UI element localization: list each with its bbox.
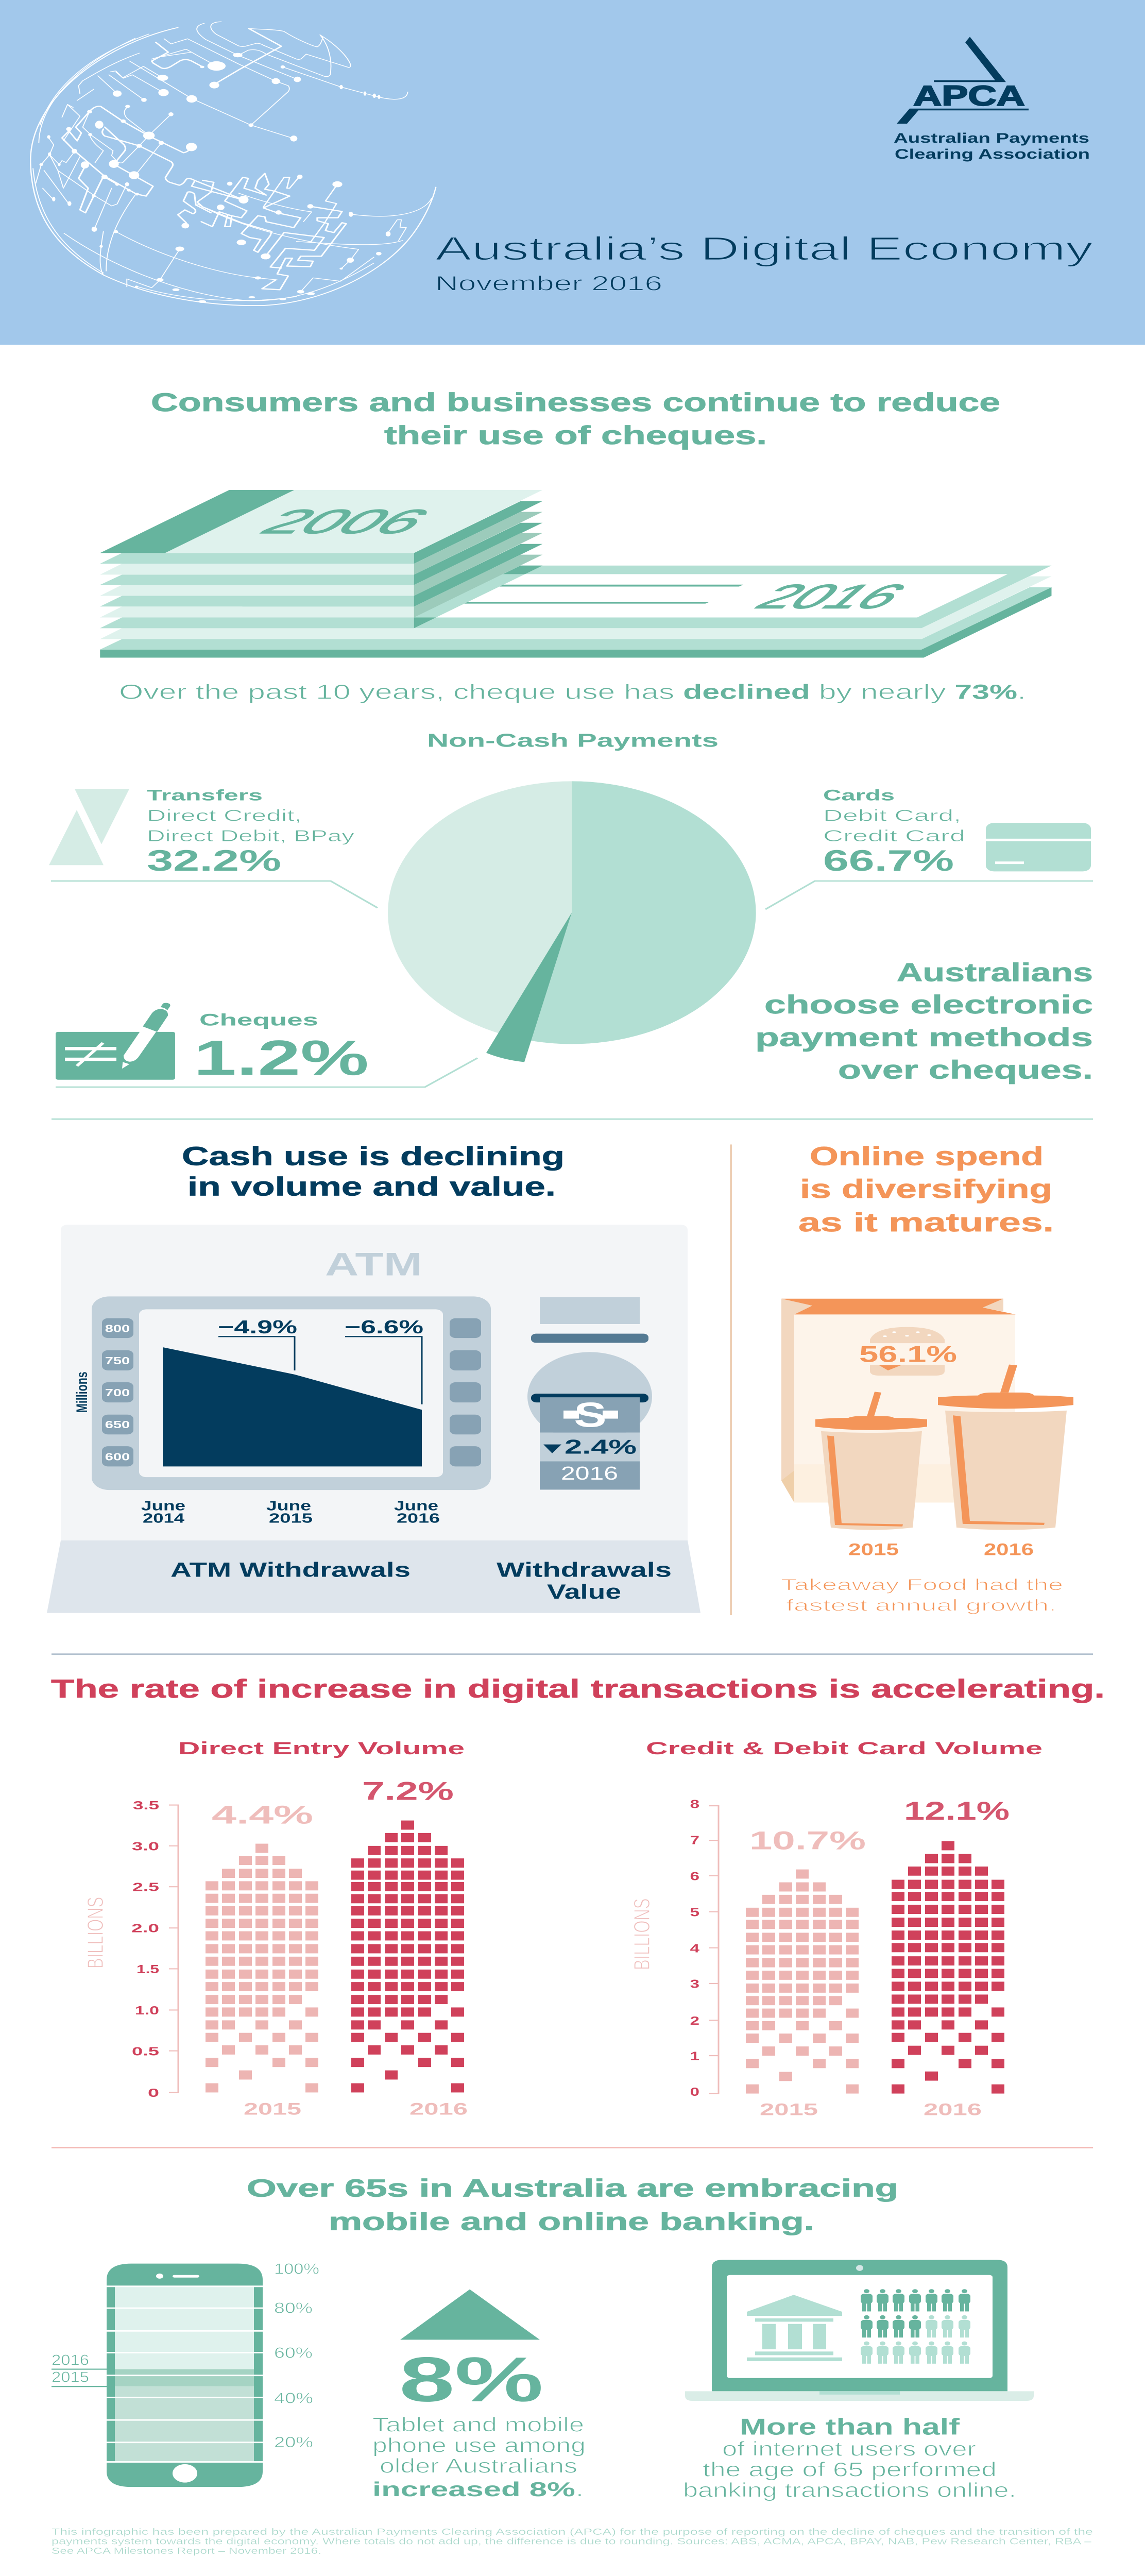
heading: direct entry: Direct Entry Volume xyxy=(178,1738,465,1758)
axis labels: 700 xyxy=(105,1387,130,1399)
heading: online spend: is diversifying xyxy=(800,1174,1052,1204)
text: tablet and mobile: phone use among xyxy=(372,2434,586,2456)
illustration: cup 2015 xyxy=(815,1392,927,1530)
axis labels: 2 xyxy=(690,2014,699,2028)
callout: electronic payments: over cheques. xyxy=(838,1055,1093,1084)
axis labels: 0 xyxy=(148,2086,159,2100)
axis labels xyxy=(105,1323,130,1463)
icon: dollar xyxy=(563,1395,618,1434)
illustration: circuit globe xyxy=(30,22,436,306)
axis labels: 3.0 xyxy=(132,1840,159,1853)
year markers xyxy=(52,2352,107,2386)
axis labels xyxy=(690,1798,699,2099)
year labels: 2016 xyxy=(409,2100,468,2119)
panel: card volume xyxy=(629,1738,1043,2119)
axis title: BILLIONS xyxy=(83,1897,108,1969)
heading: online spend: Online spend xyxy=(810,1141,1044,1171)
year labels: 2015 xyxy=(244,2100,301,2119)
panel: cash use xyxy=(47,1142,700,1613)
values xyxy=(218,1317,423,1337)
scale labels: 80% xyxy=(274,2300,313,2316)
label: ATM: ATM xyxy=(325,1247,422,1283)
leaders xyxy=(218,1336,422,1404)
text: cheques xyxy=(194,1011,369,1086)
heading: card volume: Credit & Debit Card Volume xyxy=(646,1738,1043,1758)
icon: dollar: S xyxy=(574,1395,607,1434)
value: 2016: 7.2% xyxy=(362,1776,454,1805)
axis labels: 600 xyxy=(105,1451,130,1463)
labels: cup years: 2016 xyxy=(984,1540,1034,1559)
heading: online spend xyxy=(798,1141,1054,1238)
year markers: 2016 xyxy=(52,2352,89,2368)
heading: over 65s xyxy=(247,2174,898,2235)
panel: online spend xyxy=(781,1141,1073,1615)
callout: electronic payments xyxy=(755,958,1093,1084)
label: 2016: 2016 xyxy=(743,578,920,616)
scale labels: 20% xyxy=(274,2434,313,2451)
axis labels: 650 xyxy=(105,1419,130,1431)
text: cards: 66.7% xyxy=(823,844,954,877)
axis labels xyxy=(131,1799,159,2100)
heading: digital transactions: The rate of increase in digital transactions is accelerating. xyxy=(51,1674,1105,1703)
year labels xyxy=(760,2100,982,2119)
text: cards xyxy=(823,786,965,877)
text: tablet and mobile: increased 8% . xyxy=(372,2478,584,2500)
year: 2016 xyxy=(561,1464,618,1484)
scale labels: 60% xyxy=(274,2345,313,2361)
value: withdrawals value xyxy=(543,1436,637,1458)
axis labels: 800 xyxy=(105,1323,130,1335)
values: −6.6% xyxy=(345,1317,423,1337)
axis labels: 6 xyxy=(690,1870,699,1883)
labels: cup years: 2015 xyxy=(848,1540,899,1559)
heading: non-cash payments: Non-Cash Payments xyxy=(427,731,719,751)
text: takeaway caption: Takeaway Food had the xyxy=(781,1575,1063,1594)
pie chart xyxy=(388,781,756,1062)
text: cards: Cards xyxy=(823,786,895,804)
x-axis dates xyxy=(141,1498,440,1526)
axis labels: 2.0 xyxy=(131,1922,159,1935)
text: transfers: Transfers xyxy=(147,786,263,804)
illustration: cash dispenser xyxy=(527,1297,652,1489)
text: transfers: Direct Debit, BPay xyxy=(147,827,355,845)
illustration: cheque stacks 2006 and 2016 xyxy=(100,490,1051,657)
heading: cash use xyxy=(182,1142,565,1201)
heading: cheques: their use of cheques. xyxy=(384,421,767,450)
illustration: phone chart xyxy=(52,2261,319,2487)
pictogram: 2015 xyxy=(206,1844,318,2092)
label: 2006: 2006 xyxy=(248,502,443,540)
axis labels: 1 xyxy=(690,2049,699,2063)
x-axis dates: June xyxy=(141,1498,185,1513)
icon: bank xyxy=(747,2295,842,2361)
callout: electronic payments: Australians xyxy=(897,958,1093,987)
logo: APCA: Australian Payments xyxy=(894,130,1089,146)
text: takeaway caption: fastest annual growth. xyxy=(786,1596,1056,1615)
footer: sources: See APCA Milestones Report – November 2016. xyxy=(52,2546,321,2556)
axis labels: 4 xyxy=(690,1942,699,1955)
text: transfers xyxy=(147,786,355,877)
labels: cup years xyxy=(848,1540,1034,1559)
axis labels: 5 xyxy=(690,1906,699,1919)
panel: over 65s xyxy=(52,2174,1034,2501)
axis labels: 0 xyxy=(690,2085,699,2099)
icon: burger xyxy=(870,1327,945,1376)
text: cards: Debit Card, xyxy=(823,807,961,825)
axis labels: 0.5 xyxy=(132,2045,159,2058)
subtitle: date: November 2016 xyxy=(435,272,662,295)
year labels xyxy=(244,2100,468,2119)
icon: up triangle xyxy=(400,2290,540,2340)
axis title: BILLIONS xyxy=(629,1899,655,1970)
x-axis dates: 2016 xyxy=(397,1511,440,1526)
text: tablet and mobile: older Australians xyxy=(380,2455,577,2477)
scale labels: 40% xyxy=(274,2391,313,2406)
text: more than half: banking transactions online. xyxy=(683,2479,1016,2501)
logo: APCA: APCA xyxy=(913,80,1025,112)
icon: cheque and pen xyxy=(56,1003,175,1080)
axis buttons xyxy=(102,1318,481,1466)
footer: sources: payments system towards the digital economy. Where totals do not add up, the difference is due to rounding. Sources: ABS, ACMA, APCA, BPAY, NAB, Pew Research Center, RBA – xyxy=(52,2537,1091,2547)
axis labels: 2.5 xyxy=(132,1880,159,1894)
pictogram: 2016 xyxy=(351,1821,464,2092)
text: more than half: of internet users over xyxy=(722,2438,976,2460)
axis xyxy=(709,1806,719,2094)
labels: ATM base xyxy=(170,1558,672,1603)
panel: non-cash payments xyxy=(49,731,1093,1087)
labels: ATM base: Value xyxy=(547,1581,621,1603)
illustration: laptop xyxy=(685,2260,1034,2401)
text: transfers: 32.2% xyxy=(147,844,281,877)
title: Australia’s Digital Economy xyxy=(435,230,1093,267)
heading: cash use: in volume and value. xyxy=(187,1173,556,1201)
footer: sources: This infographic has been prepared by the Australian Payments Clearing Association (APCA) for the purpose of reporting on the decline of cheques and the transition of the xyxy=(52,2527,1093,2537)
callout: electronic payments: choose electronic xyxy=(764,990,1093,1019)
footer: sources xyxy=(52,2527,1093,2556)
text: takeaway caption xyxy=(781,1575,1063,1615)
heading: over 65s: mobile and online banking. xyxy=(329,2208,814,2235)
pictogram: 2015 xyxy=(746,1870,859,2094)
text: cheque decline: Over the past 10 years, cheque use has declined by nearly 73%. xyxy=(119,681,1026,703)
area xyxy=(163,1347,422,1466)
heading: cheques xyxy=(151,388,1000,450)
axis labels: 1.5 xyxy=(136,1962,159,1976)
panel: direct entry volume xyxy=(83,1738,468,2119)
scale labels: 100% xyxy=(274,2261,319,2277)
axis title: Millions xyxy=(73,1371,91,1413)
panel: header xyxy=(0,0,1145,345)
axis labels: 7 xyxy=(690,1834,699,1847)
callout lines xyxy=(51,881,1093,1087)
value: 2015: 4.4% xyxy=(212,1800,313,1829)
text: more than half xyxy=(683,2414,1016,2501)
pictogram: 2016 xyxy=(892,1841,1004,2094)
heading: online spend: as it matures. xyxy=(798,1208,1054,1238)
axis labels: 750 xyxy=(105,1355,130,1367)
value: 2016: 12.1% xyxy=(904,1797,1010,1825)
logo: APCA: Clearing Association xyxy=(895,146,1090,162)
icon: transfers xyxy=(49,789,129,865)
labels: ATM base: Withdrawals xyxy=(497,1558,672,1582)
axis labels: 3.5 xyxy=(133,1799,159,1812)
value: withdrawals value: 2.4% xyxy=(565,1436,637,1458)
illustration: takeaway bag xyxy=(781,1299,1016,1502)
axis xyxy=(169,1805,178,2092)
axis labels: 8 xyxy=(690,1798,699,1811)
callout: electronic payments: payment methods xyxy=(755,1023,1093,1052)
value: 2015: 10.7% xyxy=(749,1826,866,1855)
heading: over 65s: Over 65s in Australia are embracing xyxy=(247,2174,898,2202)
axis labels: 1.0 xyxy=(135,2004,159,2018)
text: transfers: Direct Credit, xyxy=(147,807,302,825)
icon: people xyxy=(861,2289,970,2364)
year labels: 2015 xyxy=(760,2100,818,2119)
text: tablet and mobile xyxy=(372,2414,586,2500)
year labels: 2016 xyxy=(924,2100,982,2119)
chart: ATM withdrawals screen xyxy=(73,1296,491,1526)
heading: cash use: Cash use is declining xyxy=(182,1142,565,1171)
labels: ATM base: ATM Withdrawals xyxy=(170,1558,411,1582)
text: cheques: 1.2% xyxy=(194,1030,369,1086)
heading: cheques: Consumers and businesses continue to reduce xyxy=(151,388,1000,417)
value: takeaway growth: 56.1% xyxy=(859,1342,957,1367)
scale labels xyxy=(274,2261,319,2451)
x-axis dates: June xyxy=(266,1498,311,1513)
x-axis dates: June xyxy=(394,1498,438,1513)
x-axis dates: 2014 xyxy=(143,1511,185,1526)
x-axis dates: 2015 xyxy=(269,1511,313,1526)
year markers: 2015 xyxy=(52,2369,89,2385)
text: more than half: More than half xyxy=(740,2414,960,2440)
text: cheques: Cheques xyxy=(199,1011,318,1029)
logo: APCA xyxy=(894,37,1090,162)
text: more than half: the age of 65 performed xyxy=(703,2459,997,2481)
illustration: ATM body xyxy=(47,1225,700,1613)
value: 8 percent: 8% xyxy=(399,2344,543,2415)
axis labels: 3 xyxy=(690,1977,699,1991)
values: −4.9% xyxy=(218,1317,297,1337)
text: tablet and mobile: Tablet and mobile xyxy=(372,2414,584,2436)
illustration: cup 2016 xyxy=(938,1365,1073,1530)
icon: card xyxy=(986,823,1091,871)
text: cards: Credit Card xyxy=(823,827,965,845)
